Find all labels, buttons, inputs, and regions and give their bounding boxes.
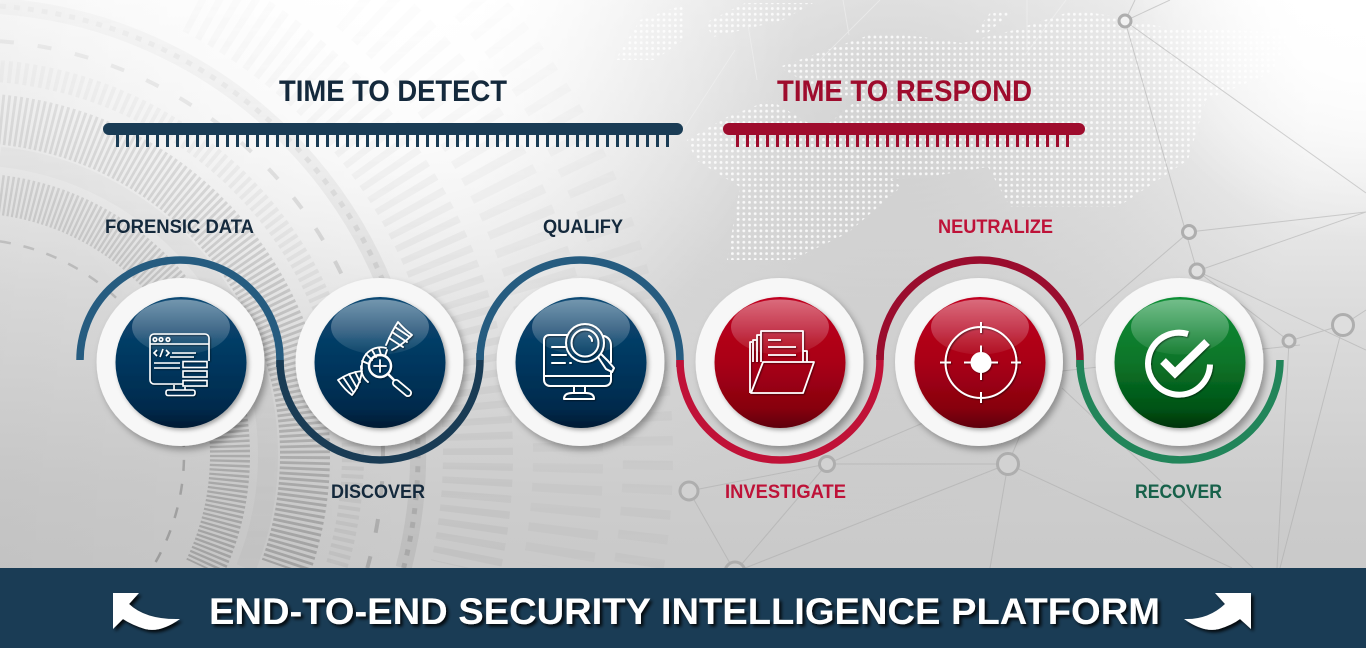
arc: neutralize — [880, 260, 1080, 367]
icon: monitor with code — [150, 334, 209, 396]
dotted world map — [615, 3, 1293, 260]
label: discover: DISCOVER — [331, 481, 425, 503]
step: investigate — [696, 278, 864, 446]
network lines — [683, 0, 1366, 572]
icon: monitor with magnifier — [544, 324, 614, 399]
timeline bar: time to respond — [723, 123, 1085, 141]
arc: qualify — [480, 260, 680, 367]
arc: forensic data — [80, 260, 280, 367]
arc: recover — [1080, 360, 1280, 460]
label: neutralize: NEUTRALIZE — [938, 216, 1053, 238]
network nodes — [680, 15, 1354, 582]
label: investigate: INVESTIGATE — [725, 481, 846, 503]
arrow: right — [1184, 593, 1251, 630]
label: recover: RECOVER — [1135, 481, 1222, 503]
arc: discover — [280, 353, 480, 460]
step: forensic data — [96, 278, 264, 446]
heading: time to detect: TIME TO DETECT — [279, 75, 507, 108]
step: recover — [1096, 278, 1264, 446]
icon: folder with papers — [750, 331, 814, 393]
icon: target — [940, 322, 1021, 403]
icon: dna with magnifier — [338, 322, 412, 395]
icon: check mark in ring — [1148, 333, 1210, 395]
step: neutralize — [895, 278, 1063, 446]
step: qualify — [496, 278, 664, 446]
arrow: left — [113, 593, 180, 630]
heading: time to respond: TIME TO RESPOND — [777, 75, 1032, 108]
step: discover — [296, 278, 464, 446]
footer title: END-TO-END SECURITY INTELLIGENCE PLATFORM — [209, 591, 1160, 632]
arc: investigate — [680, 355, 880, 460]
flow arcs — [80, 260, 1280, 460]
radial data rings — [0, 4, 512, 568]
label: qualify: QUALIFY — [543, 216, 623, 238]
footer banner — [0, 568, 1366, 648]
label: forensic data: FORENSIC DATA — [105, 216, 254, 238]
timeline bar: time to detect — [103, 123, 683, 141]
